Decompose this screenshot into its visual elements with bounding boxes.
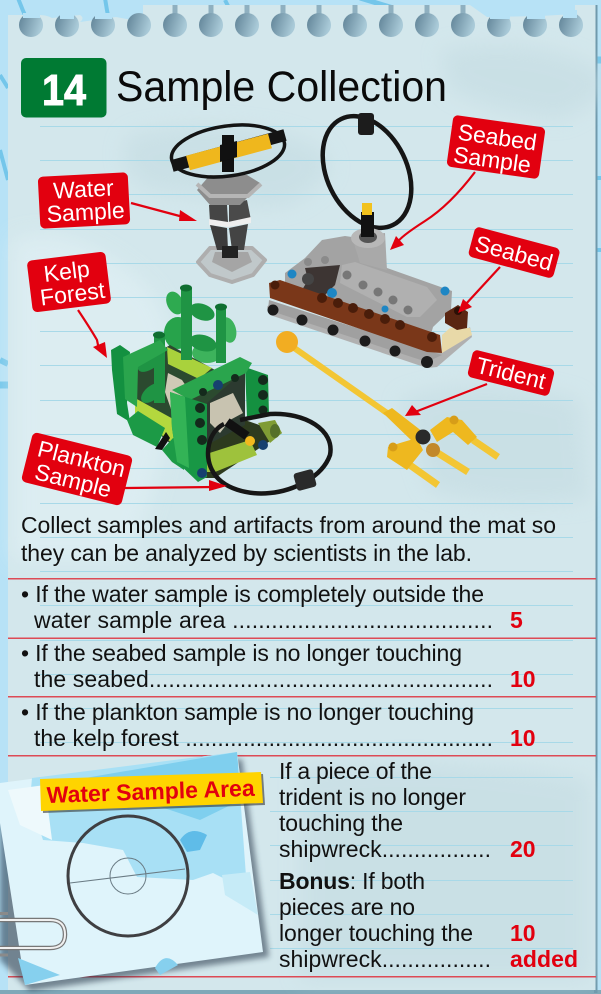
- plankton sample ring: [208, 414, 331, 493]
- trident scoring text: shipwreck.................: [279, 836, 491, 862]
- scoring row: water sample: 5: [510, 607, 523, 633]
- paper shadow: [594, 5, 598, 993]
- title: Sample Collection: [116, 63, 447, 111]
- trident scoring text: [279, 758, 536, 862]
- callout: kelp forest: Kelp: [42, 255, 91, 287]
- seabed sample model: [267, 101, 472, 368]
- callout: trident: Trident: [474, 352, 549, 394]
- ruled lines: [40, 126, 573, 948]
- paper texture: [123, 44, 601, 980]
- trident scoring text: 20: [510, 836, 536, 862]
- callout: seabed: Seabed: [472, 230, 556, 276]
- water sample area photo: [0, 752, 269, 991]
- trident scoring text: touching the: [279, 810, 403, 836]
- scoring row: seabed sample: 10: [510, 666, 536, 692]
- scoring row: plankton sample: • If the plankton sample is no longer touching: [21, 699, 474, 725]
- scoring row: water sample: water sample area ........................................: [33, 607, 493, 633]
- callout: plankton sample: Sample: [32, 458, 114, 502]
- scoring row: water sample: [21, 581, 523, 633]
- kelp forest model: [111, 284, 282, 482]
- trident scoring text: trident is no longer: [279, 784, 466, 810]
- section number badge: [21, 58, 106, 118]
- callout: water sample: Water: [53, 174, 115, 204]
- scoring row: seabed sample: • If the seabed sample is no longer touching: [21, 640, 462, 666]
- paperclip: [0, 914, 65, 955]
- water sample model: [168, 118, 288, 282]
- bonus scoring text: shipwreck.................: [279, 946, 491, 972]
- scoring row: seabed sample: [21, 640, 536, 692]
- callout: seabed sample: [390, 115, 546, 250]
- callout: water sample: [38, 172, 197, 229]
- scoring row: seabed sample: the seabed.....................................................: [34, 666, 493, 692]
- scoring row: plankton sample: 10: [510, 725, 536, 751]
- scoring row: plankton sample: [21, 699, 536, 751]
- callout: kelp forest: [27, 251, 111, 358]
- callout: plankton sample: Plankton: [35, 435, 128, 482]
- intro text: Collect samples and artifacts from around the mat so: [21, 512, 556, 538]
- scoring row: plankton sample: the kelp forest ................................................: [34, 725, 493, 751]
- callout: seabed: [458, 226, 561, 313]
- intro text: they can be analyzed by scientists in the lab.: [21, 540, 472, 566]
- bonus scoring text: 10: [510, 920, 536, 946]
- red dividers: [8, 578, 596, 978]
- callout: plankton sample: [21, 432, 227, 506]
- trident model: [276, 331, 498, 485]
- callout: seabed sample: Seabed: [456, 119, 538, 155]
- callout: kelp forest: Forest: [39, 277, 107, 311]
- intro text: [21, 512, 556, 566]
- bonus scoring text: pieces are no: [279, 894, 415, 920]
- bonus scoring text: longer touching the: [279, 920, 473, 946]
- bonus scoring text: Bonus: If both: [279, 868, 425, 894]
- trident scoring text: If a piece of the: [279, 758, 432, 784]
- bonus scoring text: added: [510, 946, 578, 972]
- water sample area label: Water Sample Area: [46, 775, 255, 808]
- bonus scoring text: [279, 868, 578, 972]
- callout: trident: [405, 349, 555, 416]
- section number badge: 14: [42, 66, 86, 115]
- callout: seabed sample: Sample: [452, 141, 533, 178]
- callout: water sample: Sample: [46, 197, 125, 227]
- scoring row: water sample: • If the water sample is completely outside the: [21, 581, 484, 607]
- notebook holes: [19, 5, 583, 37]
